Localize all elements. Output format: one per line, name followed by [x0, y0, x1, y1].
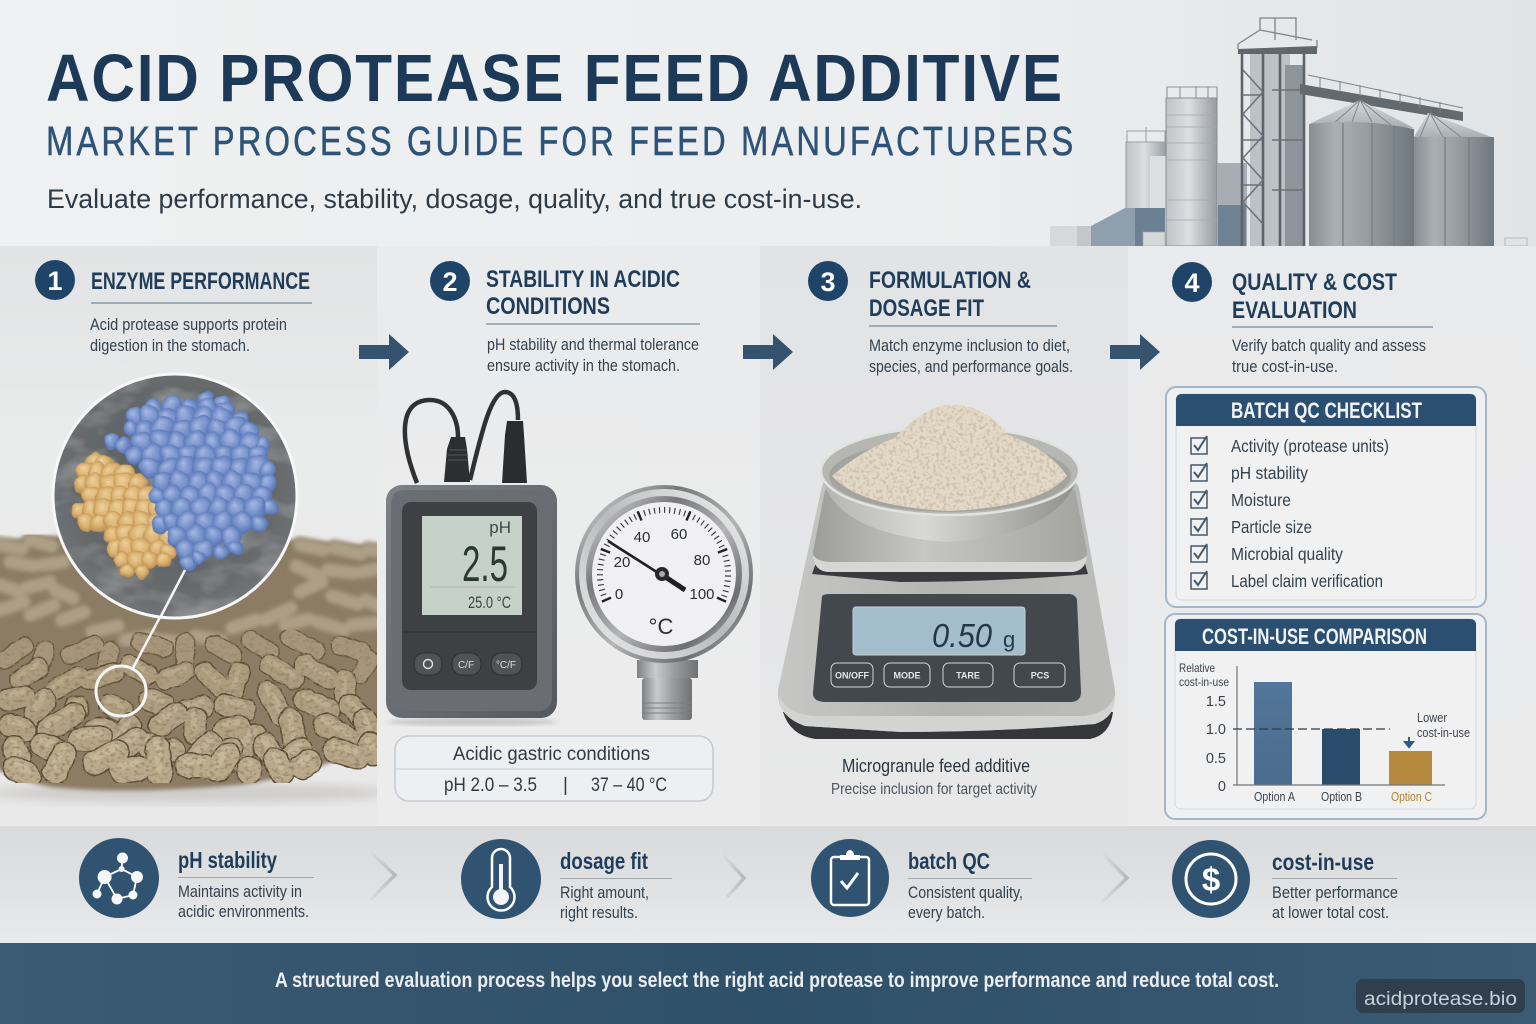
checklist header: BATCH QC CHECKLIST: [1231, 398, 1422, 423]
description: [487, 335, 699, 375]
callout: acidic gastric conditions: pH 2.0 – 3.5: [444, 775, 537, 796]
bar chart: Option C: [1391, 789, 1432, 804]
illustration: feed mill silos: [1050, 18, 1527, 246]
description: Verify batch quality and assess: [1232, 336, 1426, 355]
checklist header: [1176, 394, 1476, 426]
benefit: pH stability: [79, 838, 314, 921]
text: pH stability: [178, 847, 314, 921]
description: [869, 336, 1073, 376]
gold subunit: [71, 452, 177, 579]
text: pH stability: Maintains activity in: [178, 882, 302, 901]
step number 4: 4: [1184, 268, 1200, 298]
arrow: step 1 to 2: [359, 334, 409, 370]
step number 4: [1172, 262, 1212, 302]
callout: acidic gastric conditions: [395, 736, 713, 801]
watermark: acidprotease.bio: [1364, 988, 1517, 1010]
checklist items: pH stability: [1231, 463, 1308, 483]
device: thermometer dial gauge: 20: [614, 554, 630, 571]
bar chart: Relative: [1179, 661, 1215, 675]
text: dosage fit: [560, 848, 672, 922]
tagline: Evaluate performance, stability, dosage, quality, and true cost-in-use.: [47, 184, 862, 214]
icon: clipboard: [811, 839, 889, 917]
device: digital scale with granules: MODE: [894, 670, 920, 680]
text: batch QC: every batch.: [908, 903, 985, 922]
icon: thermometer: [461, 839, 541, 919]
text: cost-in-use: cost-in-use: [1272, 849, 1374, 875]
description: true cost-in-use.: [1232, 357, 1338, 376]
checklist items: Particle size: [1231, 517, 1312, 537]
device: thermometer dial gauge: 100: [689, 586, 715, 603]
heading: quality and cost: EVALUATION: [1232, 297, 1357, 324]
arrow: step 2 to 3: [743, 334, 793, 370]
device: pH meter: C/F: [458, 660, 474, 671]
bar chart: 1.0: [1206, 722, 1226, 738]
arrow: chevron 1: [368, 850, 395, 900]
bar chart: Option A: [1254, 789, 1295, 804]
text: pH stability: acidic environments.: [178, 902, 309, 921]
text: pH stability: pH stability: [178, 847, 277, 873]
panel: stability in acidic conditions: [386, 261, 753, 801]
panel: benefits strip background: [0, 826, 1536, 943]
description: Acid protease supports protein: [90, 315, 287, 334]
panel: enzyme performance: [0, 260, 395, 803]
bar chart: 1.5: [1206, 694, 1226, 710]
heading: stability: CONDITIONS: [486, 293, 610, 320]
panel: column backgrounds: [0, 246, 1536, 826]
magnifier: enzyme protein close-up: [53, 374, 297, 716]
heading: stability: [486, 266, 680, 320]
device: pH meter: [386, 392, 557, 726]
benefit: dosage fit: [461, 839, 672, 922]
heading: formulation: [869, 267, 1031, 322]
heading: formulation: FORMULATION &: [869, 267, 1031, 294]
text: dosage fit: Right amount,: [560, 883, 649, 902]
device: digital scale with granules: 0.50: [932, 617, 993, 654]
step number 1: [35, 260, 75, 300]
device: digital scale with granules: g: [1003, 627, 1015, 652]
heading: enzyme performance: ENZYME PERFORMANCE: [91, 268, 310, 295]
device: thermometer dial gauge: 0: [615, 586, 623, 603]
heading: stability: STABILITY IN ACIDIC: [486, 266, 680, 293]
icon: dollar coin: $: [1202, 861, 1220, 898]
text: cost-in-use: at lower total cost.: [1272, 903, 1389, 922]
text: batch QC: [908, 848, 1032, 922]
checklist items: Label claim verification: [1231, 571, 1383, 591]
arrow: chevron 2: [721, 853, 744, 897]
description: pH stability and thermal tolerance: [487, 335, 699, 354]
step number 3: 3: [820, 267, 836, 297]
text: cost-in-use: Better performance: [1272, 883, 1398, 902]
text: dosage fit: dosage fit: [560, 848, 648, 874]
footer banner: A structured evaluation process helps you select the right acid protease to improve performance and reduce total cost.: [275, 969, 1279, 992]
heading: formulation: DOSAGE FIT: [869, 295, 984, 322]
device: pH meter: 25.0 °C: [468, 593, 511, 612]
bar chart: cost-in-use: [1417, 726, 1470, 740]
step number 2: [430, 261, 470, 301]
benefit: cost-in-use: [1172, 840, 1398, 922]
caption: microgranule feed additive: Precise inclusion for target activity: [831, 781, 1037, 798]
caption: microgranule feed additive: [831, 756, 1037, 798]
device: thermometer dial gauge: 40: [634, 529, 650, 546]
watermark: [1356, 979, 1525, 1013]
callout: acidic gastric conditions: |: [563, 775, 568, 796]
device: thermometer dial gauge: 60: [671, 526, 687, 543]
subtitle: MARKET PROCESS GUIDE FOR FEED MANUFACTURERS: [46, 117, 1073, 164]
checklist items: Activity (protease units): [1231, 436, 1389, 456]
title: ACID PROTEASE FEED ADDITIVE: [46, 40, 1062, 116]
step number 3: [808, 261, 848, 301]
panel: quality and cost evaluation: [1165, 262, 1486, 819]
device: pH meter: pH: [489, 518, 511, 537]
bar chart: Lower: [1417, 711, 1447, 725]
card: batch QC checklist: [1166, 387, 1486, 607]
description: Match enzyme inclusion to diet,: [869, 336, 1070, 355]
device: thermometer dial gauge: °C: [649, 614, 673, 639]
caption: microgranule feed additive: Microgranule feed additive: [842, 756, 1030, 776]
bar chart: [1179, 661, 1470, 804]
benefit: batch QC: [811, 839, 1032, 922]
checklist items: Moisture: [1231, 490, 1291, 510]
icon: dollar coin: [1172, 840, 1250, 918]
device: digital scale with granules: [778, 405, 1115, 739]
image: feed pellets pile: [0, 533, 395, 803]
footer banner: [0, 943, 1536, 1024]
description: ensure activity in the stomach.: [487, 356, 680, 375]
step number 2: 2: [442, 267, 458, 297]
panel: formulation and dosage fit: [778, 261, 1115, 798]
description: [90, 315, 287, 355]
step number 1: 1: [47, 266, 63, 296]
text: batch QC: batch QC: [908, 848, 990, 874]
text: dosage fit: right results.: [560, 903, 638, 922]
callout: acidic gastric conditions: Acidic gastric conditions: [453, 744, 650, 765]
blue subunit: [104, 390, 278, 570]
checklist items: Microbial quality: [1231, 544, 1343, 564]
heading: quality and cost: [1232, 269, 1397, 324]
text: cost-in-use: [1272, 849, 1398, 922]
bar chart: 0: [1218, 779, 1226, 795]
device: digital scale with granules: PCS: [1031, 670, 1049, 680]
device: digital scale with granules: ON/OFF: [835, 670, 869, 680]
icon: molecule: [79, 838, 159, 918]
chart header: [1175, 619, 1476, 651]
device: pH meter: 2.5: [462, 536, 508, 592]
callout: acidic gastric conditions: 37 – 40 °C: [591, 775, 667, 796]
bar chart: Option B: [1321, 789, 1362, 804]
description: digestion in the stomach.: [90, 336, 250, 355]
device: thermometer dial gauge: [575, 485, 753, 720]
checklist items: [1191, 436, 1389, 591]
chart header: COST-IN-USE COMPARISON: [1202, 624, 1427, 649]
bar chart: cost-in-use: [1179, 675, 1229, 689]
device: pH meter: °C/F: [496, 660, 516, 671]
description: [1232, 336, 1426, 376]
text: batch QC: Consistent quality,: [908, 883, 1023, 902]
arrow: chevron 3: [1100, 851, 1127, 902]
device: thermometer dial gauge: 80: [694, 552, 710, 569]
description: species, and performance goals.: [869, 357, 1073, 376]
bar chart: 0.5: [1206, 751, 1226, 767]
header background: [0, 0, 1536, 246]
device: digital scale with granules: TARE: [956, 670, 980, 680]
arrow: step 3 to 4: [1110, 334, 1160, 370]
card: cost-in-use comparison: [1165, 614, 1486, 819]
heading: quality and cost: QUALITY & COST: [1232, 269, 1397, 296]
